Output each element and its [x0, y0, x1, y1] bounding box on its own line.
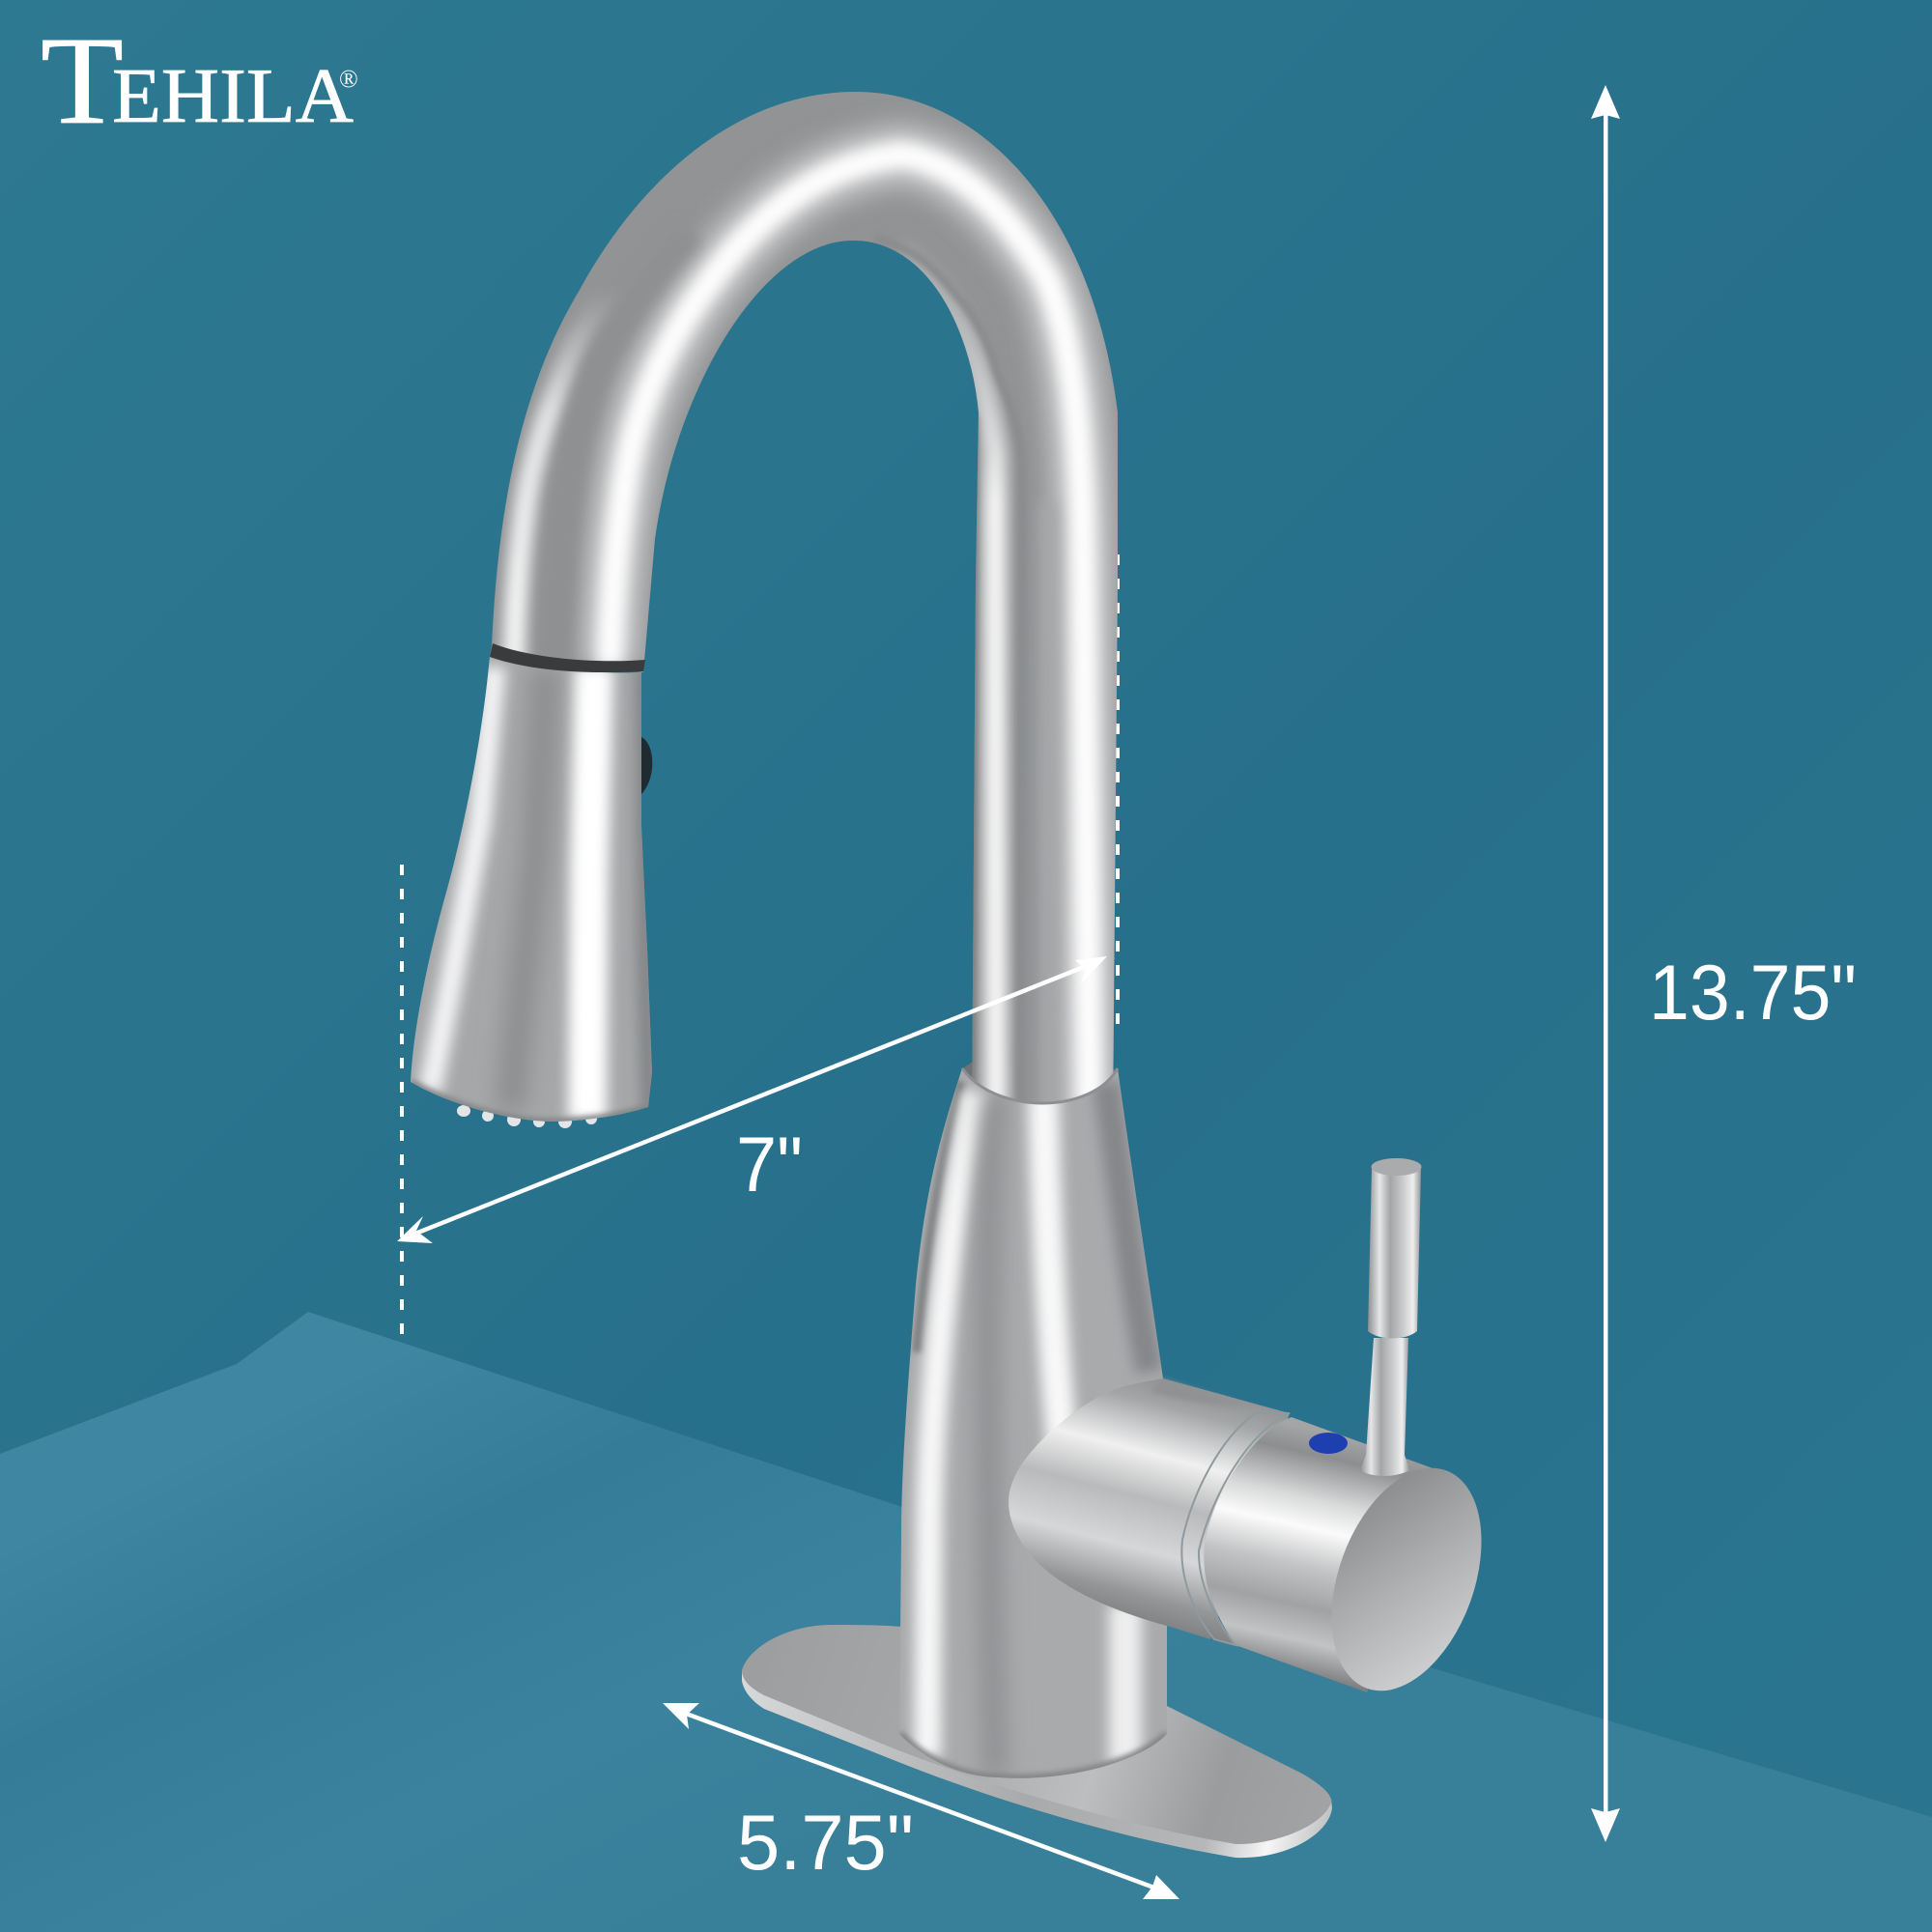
logo: Tehila: T [41, 12, 124, 151]
cap cylinder [1204, 1417, 1446, 1692]
countertop surface [0, 1312, 1932, 1932]
lever stem [1360, 1338, 1409, 1476]
base collar edge [962, 1068, 1118, 1103]
deck plate [742, 1625, 1332, 1858]
spout [490, 92, 1118, 1121]
logo: Tehila: ® [339, 65, 358, 93]
arrow: 13.75 inch height [1591, 85, 1620, 1842]
lever hub [1009, 1378, 1290, 1639]
label: plate width 5.75: 5.75" [737, 1800, 914, 1887]
collar ring [1181, 1412, 1290, 1645]
lever grip [1368, 1169, 1421, 1339]
sprayhead [411, 656, 652, 1122]
arrow: 5.75 inch plate width [663, 1703, 1179, 1899]
label: height 13.75: 13.75" [1649, 950, 1857, 1037]
dashed guide: right of spout [1116, 554, 1120, 1024]
back rim of base collar [961, 1051, 1116, 1097]
pull-down ring [490, 643, 645, 672]
dashed guide: left of sprayhead [400, 865, 404, 1335]
arrow: 7 inch reach [397, 956, 1107, 1243]
logo: Tehila [41, 12, 358, 151]
logo: Tehila: EHILA [112, 54, 354, 139]
label: reach 7: 7" [736, 1122, 803, 1208]
trigger button [641, 737, 652, 794]
blue indicator button [1309, 1433, 1348, 1454]
cap end face [1303, 1447, 1510, 1712]
faucet base [899, 1068, 1167, 1778]
lever handle [1360, 1158, 1422, 1476]
spray nozzles [457, 1105, 597, 1128]
faucet [411, 92, 1510, 1858]
lever top [1372, 1158, 1422, 1176]
